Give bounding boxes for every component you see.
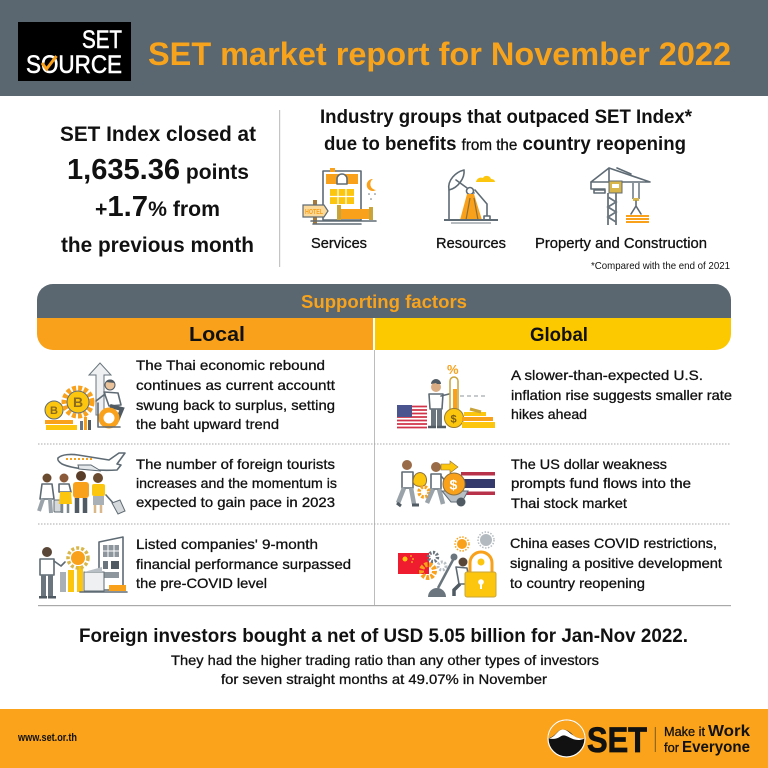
panel: SET Index summary: +1.7% from [95,191,220,223]
slogan: Everyone [682,739,750,756]
text: listed companies [136,536,351,591]
icon: businessman, gear and buildings [39,537,127,598]
slogan: for [664,740,680,755]
text: China reopening [510,535,722,591]
heading: Local [37,318,373,350]
logo: SET Source: SET [82,26,122,54]
slogan: Work [708,723,750,740]
text: foreign tourists: expected to gain pace in 2023 [136,494,335,510]
title: SET market report for November 2022 [148,36,731,72]
text block: foreign investors summary: They had the higher trading ratio than any other types of investors [171,652,599,668]
text: economic rebound [136,357,335,432]
panel: supporting factors [37,284,732,606]
text: China reopening: China eases COVID restrictions, [510,535,717,551]
text block: foreign investors summary: for seven straight months at 49.07% in November [221,671,547,687]
icon: investors, wheelbarrow and Thai flag: $ [450,476,458,492]
factor: US dollar weakness [397,456,691,511]
icon: investors, wheelbarrow and Thai flag [397,460,495,506]
text: listed companies: financial performance surpassed [136,556,351,572]
text: dollar weakness: Thai stock market [511,495,627,511]
panel: SET Index summary: SET Index closed at [60,123,256,146]
label: Resources: Resources [436,235,506,252]
text: dollar weakness [511,456,691,511]
panel: SET Index summary [60,123,256,257]
logo: SET [548,720,647,760]
factor: foreign tourists [39,453,337,514]
factor: Thai economic rebound [45,357,335,432]
heading: Global: Global [530,325,588,346]
heading: Global [375,318,731,350]
text: listed companies: the pre-COVID level [136,575,267,591]
icon: coins, gear and cyclist: B [50,405,58,417]
industry heading [320,107,693,155]
text block: foreign investors summary: Foreign investors bought a net of USD 5.05 billion for Jan-Nov 2022. [79,626,688,647]
text: US inflation: hikes ahead [511,406,587,422]
text block: foreign investors summary [79,626,688,687]
factor: China reopening [398,532,722,597]
footer band [0,709,768,768]
heading bar: Supporting factors: Supporting factors [301,291,467,312]
icon: China flag, gears and padlock [398,532,496,597]
icon: coins, gear and cyclist: B [73,394,83,410]
logo: SET Source [18,22,131,81]
text: foreign tourists [136,456,337,510]
logo: SET Source: SOURCE [26,51,122,79]
icon: hotel services: HOTEL [305,209,324,216]
text: foreign tourists: The number of foreign tourists [136,456,335,472]
text: economic rebound: the baht upward trend [136,416,279,432]
text: foreign tourists: increases and the momentum is [136,475,337,491]
text: economic rebound: The Thai economic rebound [136,357,325,373]
text: economic rebound: swung back to surplus, setting [136,397,335,413]
heading: Local: Local [189,324,245,346]
icon: oil pump resources [444,170,498,223]
footnote: *Compared with the end of 2021 [591,260,730,272]
industry heading: due to benefits from the country reopening [324,134,686,155]
text: economic rebound: continues as current accountt [136,377,335,393]
panel: outperforming industry groups [303,107,730,272]
text: US inflation: A slower-than-expected U.S. [511,367,703,383]
logo: SET: SET [587,721,647,760]
text: dollar weakness: prompts fund flows into the [511,475,691,491]
icon: coins, gear and cyclist [45,363,122,430]
text: China reopening: to country reopening [510,575,645,591]
label: Property and Construction: Property and Construction [535,235,707,252]
text: US inflation [511,367,732,422]
icon: tower crane [591,168,650,225]
text: China reopening: signaling a positive development [510,555,722,571]
icon: hotel services [303,168,376,224]
panel: SET Index summary: 1,635.36 points [67,154,249,186]
text: US inflation: inflation rise suggests smaller rate [511,387,732,403]
slogan [664,723,750,756]
factor: listed companies [39,536,351,598]
icon: US flag, thermometer and coins: $ [450,414,457,426]
icon: US flag, thermometer and coins [397,362,495,428]
panel: SET Index summary: the previous month [61,234,254,257]
header band [0,0,768,96]
slogan: Make it [664,724,705,739]
icon: airplane and travellers [39,453,125,514]
text: listed companies: Listed companies' 9-month [136,536,318,552]
factor: US inflation [397,362,732,428]
text: dollar weakness: The US dollar weakness [511,456,667,472]
label: Services: Services [311,235,367,252]
website: www.set.or.th [17,732,77,744]
icon: US flag, thermometer and coins: % [447,362,459,377]
heading bar: Supporting factors [37,284,731,318]
industry heading: Industry groups that outpaced SET Index* [320,107,693,128]
